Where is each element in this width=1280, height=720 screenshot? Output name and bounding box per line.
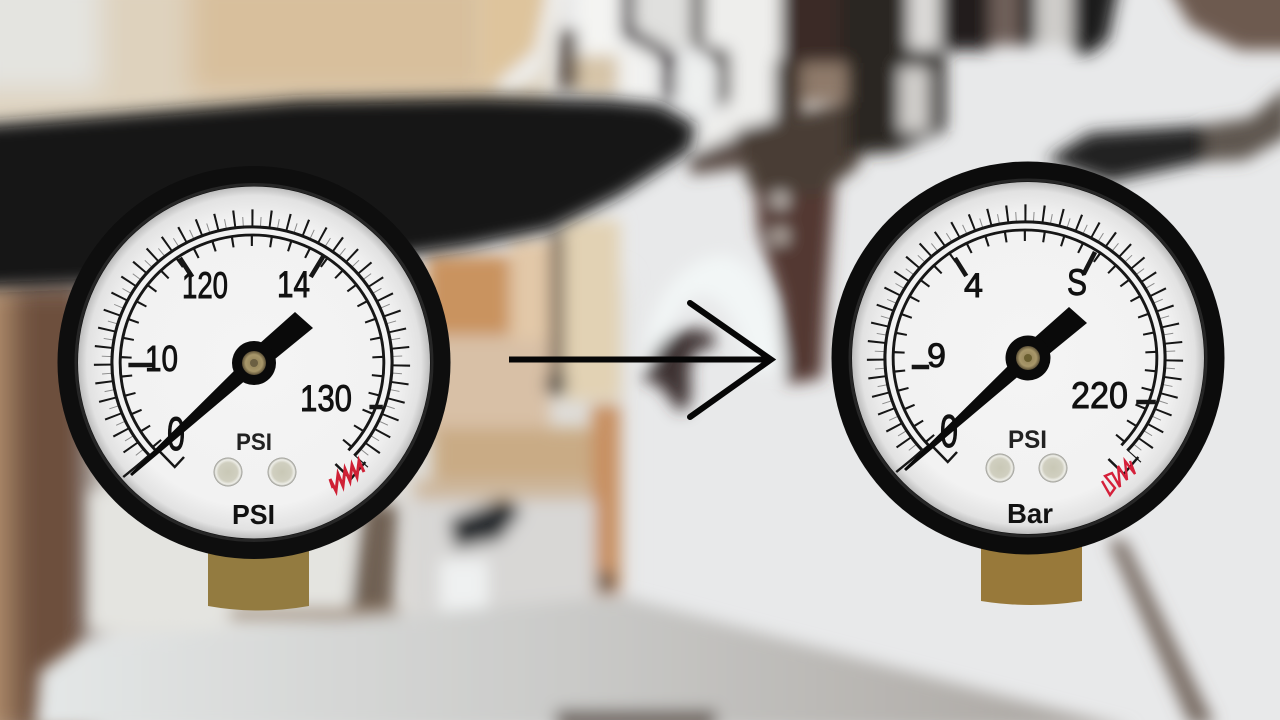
dial numbers: 130 xyxy=(300,378,352,419)
top machinery xyxy=(480,0,546,85)
right gauge: Bar xyxy=(832,162,1224,605)
dial numbers: 0 xyxy=(940,405,958,457)
white dial face xyxy=(78,186,430,538)
white dial face xyxy=(852,182,1204,534)
brass stem xyxy=(981,545,1082,605)
mounting screws xyxy=(214,458,296,486)
scale ticks xyxy=(876,213,1174,474)
warm shelves xyxy=(427,255,512,340)
wall arc xyxy=(645,255,785,370)
large PSI label: PSI xyxy=(232,499,275,530)
dial numbers: 0 xyxy=(167,407,185,460)
mounting screws xyxy=(986,454,1068,482)
black bezel xyxy=(58,166,450,559)
dial numbers: 220 xyxy=(1071,375,1128,416)
tray xyxy=(35,596,1135,720)
dark group handle xyxy=(0,97,695,288)
dial numbers: 14 xyxy=(277,264,310,305)
spout xyxy=(755,180,835,384)
black bezel xyxy=(832,162,1224,554)
small PSI label: PSI xyxy=(1008,426,1047,454)
dial numbers: S xyxy=(1067,262,1087,303)
faucet knob xyxy=(640,329,715,412)
needle xyxy=(130,312,313,476)
arrow: PSI to Bar xyxy=(509,303,771,417)
scale ticks xyxy=(103,218,401,479)
dial numbers xyxy=(927,262,1128,457)
dial numbers xyxy=(145,264,352,460)
dial numbers: 4 xyxy=(964,267,983,305)
dial numbers: 10 xyxy=(145,338,178,379)
red maker mark xyxy=(330,461,364,491)
needle xyxy=(904,307,1087,471)
brass stem xyxy=(208,550,309,610)
Bar label: Bar xyxy=(1007,498,1053,529)
small PSI label: PSI xyxy=(236,429,272,456)
red maker mark xyxy=(1102,461,1135,495)
dial numbers: 120 xyxy=(182,265,228,306)
dial numbers: 9 xyxy=(927,337,946,375)
left gauge: PSI xyxy=(58,166,450,610)
